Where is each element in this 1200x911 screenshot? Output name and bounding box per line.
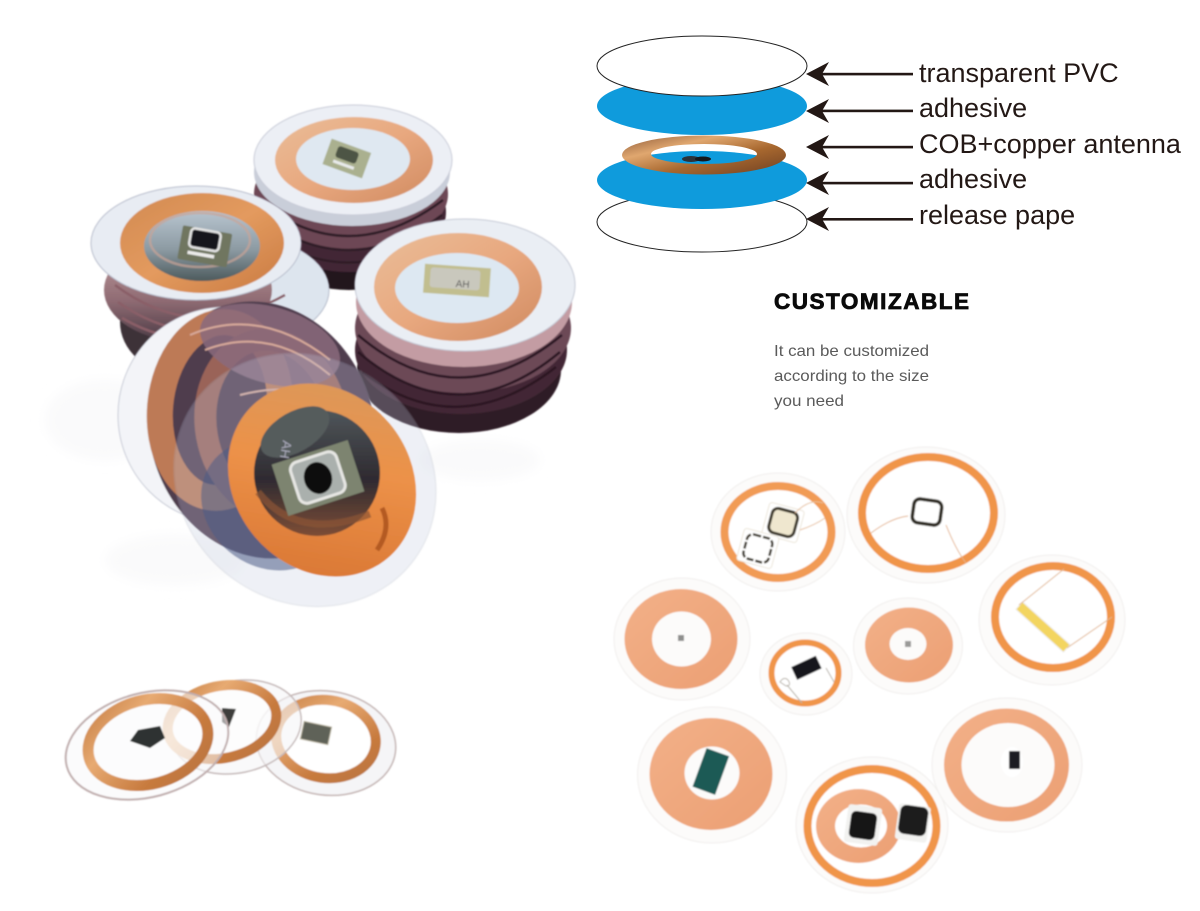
coin: right	[249, 682, 403, 804]
label: adhesive lower: adhesive	[919, 164, 1027, 194]
label: release pape: release pape	[919, 200, 1075, 230]
tag: double ring with black chips	[796, 757, 948, 893]
layer: COB and copper antenna	[622, 135, 786, 175]
stack: right	[355, 219, 575, 433]
stack: front tilted	[115, 272, 486, 657]
body text: according to the size	[774, 368, 929, 385]
photo: three coin tags	[53, 668, 403, 817]
stack: left	[91, 186, 329, 374]
stack: right: AH	[455, 279, 470, 291]
heading: CUSTOMIZABLE	[774, 289, 969, 314]
arrow: transparent PVC	[806, 62, 913, 86]
tag: bar chip	[979, 555, 1125, 685]
layer diagram	[597, 36, 807, 252]
label: transparent PVC: transparent PVC	[919, 58, 1119, 88]
table surface streaks	[45, 380, 540, 585]
layer: release paper	[597, 192, 807, 252]
coin: left	[53, 673, 241, 817]
layer: lower adhesive	[597, 151, 807, 209]
tag: wide copper with green chip	[638, 707, 786, 843]
stack: front tilted: AH	[277, 439, 295, 460]
label: adhesive: adhesive	[919, 93, 1027, 123]
tag: wide copper center	[854, 598, 962, 694]
tag: medium copper with tiny chip	[932, 698, 1082, 832]
tag: two square chips	[711, 473, 845, 591]
photo: assorted coin tags	[614, 447, 1125, 893]
arrow: adhesive lower	[806, 171, 913, 195]
arrow: COB and copper antenna	[806, 135, 913, 159]
body text: It can be customized	[774, 343, 929, 360]
coin: middle	[161, 668, 310, 786]
tag: wide copper left	[614, 578, 750, 700]
layer: transparent PVC	[597, 36, 807, 96]
stack: back	[254, 105, 452, 290]
tag: small with black chip	[760, 633, 852, 715]
body text: you need	[774, 393, 844, 410]
body text	[774, 343, 929, 410]
tag: large thin ring with chip	[847, 447, 1005, 583]
arrow: release paper	[806, 207, 913, 231]
arrow: adhesive	[806, 99, 913, 123]
photo: stacks of coin tags	[45, 105, 575, 657]
layer: upper adhesive	[597, 77, 807, 135]
label: COB+copper antenna: COB+copper antenna	[919, 129, 1182, 159]
